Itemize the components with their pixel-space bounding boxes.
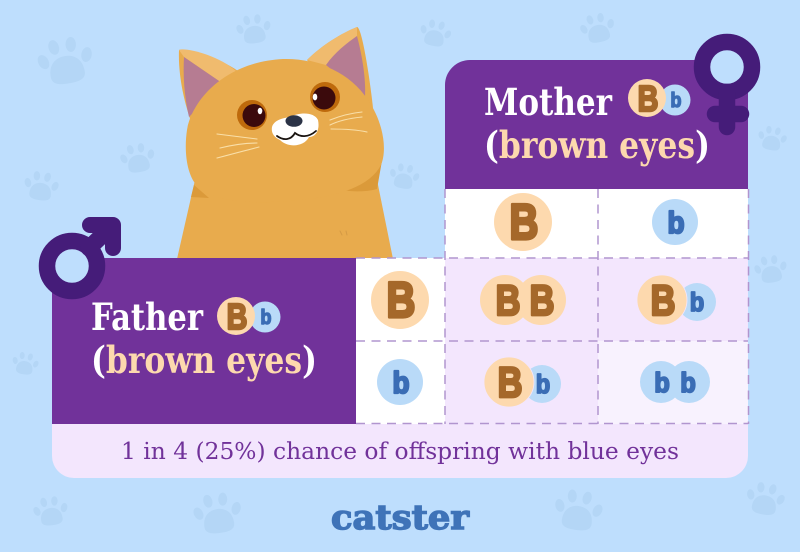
left ear highlight xyxy=(179,49,236,83)
offspring cell bb xyxy=(598,341,748,424)
punnett grid xyxy=(356,189,748,424)
right inner ear xyxy=(326,36,365,97)
panel: father xyxy=(52,258,356,424)
mouth xyxy=(277,131,316,139)
offspring: bb: b xyxy=(680,367,696,398)
offspring: BB xyxy=(480,275,566,325)
allele badge: father Bb: b xyxy=(261,307,271,329)
allele: mother b xyxy=(652,199,698,245)
heading: father: Father xyxy=(91,295,203,339)
allele: mother B: B xyxy=(510,194,538,250)
right ear highlight xyxy=(307,27,357,65)
right whiskers xyxy=(330,112,367,132)
offspring: BB: B xyxy=(496,277,520,325)
allele: mother B xyxy=(494,193,552,251)
dashed grid lines xyxy=(356,189,748,424)
cat head xyxy=(186,59,384,202)
heading: father xyxy=(91,295,317,382)
allele: father b: b xyxy=(392,366,410,400)
chest tuft xyxy=(340,231,347,235)
allele badge: mother Bb xyxy=(628,78,690,119)
heading: mother: Mother xyxy=(484,80,612,124)
allele: mother b: b xyxy=(667,206,685,240)
allele: father b xyxy=(377,359,423,405)
offspring cell Bb bottom xyxy=(445,341,598,424)
left ear xyxy=(179,50,238,132)
offspring: BB: B xyxy=(530,277,554,325)
left eye xyxy=(237,100,267,130)
left whiskers xyxy=(217,134,259,158)
right shoulder shade xyxy=(343,155,383,191)
panel: mother xyxy=(445,60,748,189)
symbol: male xyxy=(47,225,113,291)
offspring: Bb top: B xyxy=(651,277,675,325)
bottom caption panel xyxy=(52,420,748,478)
offspring: Bb top xyxy=(637,275,716,325)
allele badge: father Bb: B xyxy=(227,296,247,337)
offspring: Bb bottom: b xyxy=(536,371,550,399)
heading: mother: (brown eyes) xyxy=(484,123,710,167)
heading: mother xyxy=(484,80,710,167)
symbol: female xyxy=(702,42,752,127)
allele: father B: B xyxy=(387,272,415,328)
cat body xyxy=(177,175,393,259)
right eye xyxy=(310,82,340,112)
offspring cell Bb top xyxy=(598,258,748,341)
offspring: Bb bottom: B xyxy=(498,359,522,407)
right ear xyxy=(307,27,373,108)
offspring: bb: b xyxy=(654,367,670,398)
left inner ear xyxy=(184,57,222,117)
logo: catster: catster xyxy=(331,498,470,538)
nose xyxy=(286,115,302,127)
offspring: Bb bottom xyxy=(484,357,561,407)
illustration: orange cat xyxy=(177,27,393,259)
allele badge: mother Bb: b xyxy=(671,90,681,112)
heading: father: (brown eyes) xyxy=(91,338,317,382)
offspring: bb xyxy=(640,361,710,403)
muzzle xyxy=(272,114,319,145)
caption text: 1 in 4 (25%) chance of offspring with blue eyes xyxy=(121,439,679,465)
offspring cell BB xyxy=(445,258,598,341)
allele badge: father Bb xyxy=(217,296,280,337)
allele badge: mother Bb: B xyxy=(638,78,658,119)
offspring: Bb top: b xyxy=(690,289,704,317)
left shoulder shade xyxy=(191,185,209,198)
grid cell backgrounds xyxy=(356,189,748,424)
allele: father B xyxy=(371,271,429,329)
